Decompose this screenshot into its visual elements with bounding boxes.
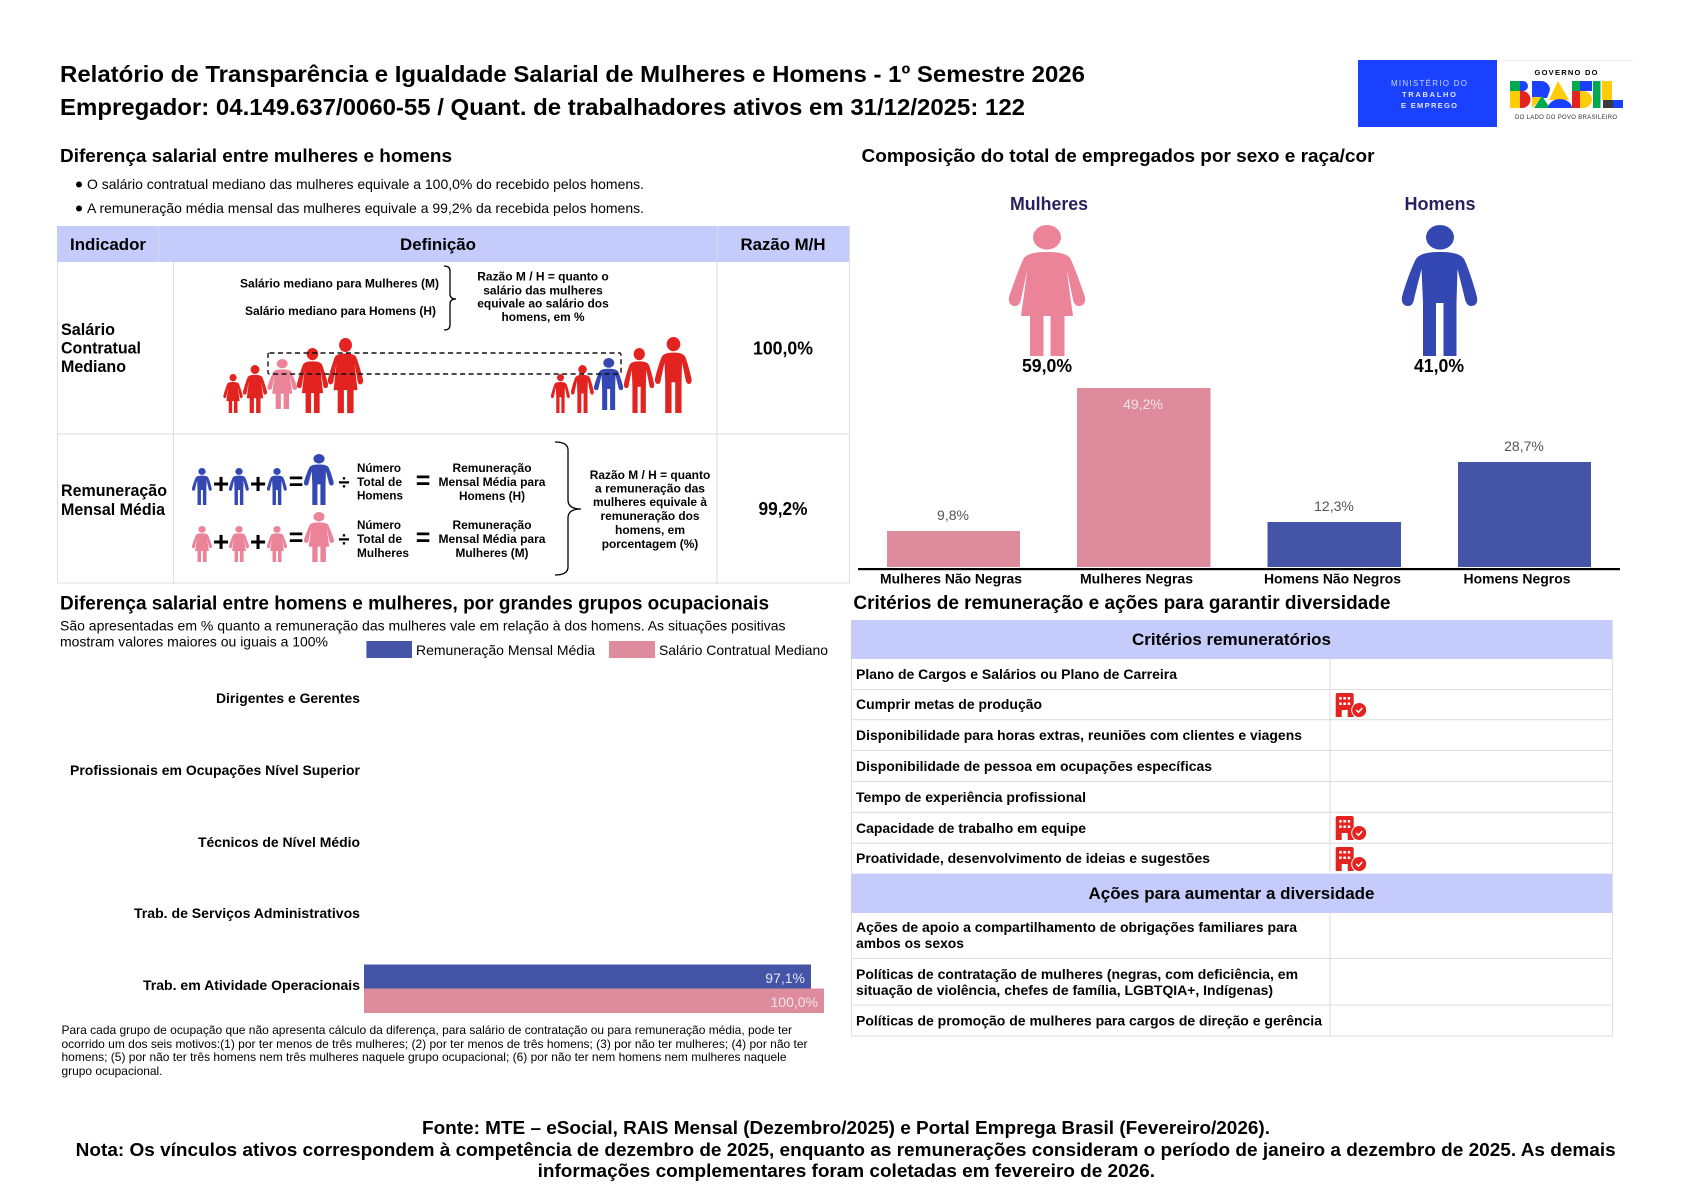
value: 99,2%: [758, 499, 808, 519]
formula: women: ÷: [339, 529, 350, 551]
criteria rows: Disponibilidade para horas extras, reuniões com clientes e viagens: [856, 728, 1302, 743]
heading: grupos ocupacionais: Diferença salarial entre homens e mulheres, por grandes grupos ocupacionais: [60, 594, 769, 614]
criteria rows: [856, 667, 1302, 866]
title: [60, 61, 1085, 120]
row: salário contratual mediano: [61, 266, 813, 413]
criteria rows: Proatividade, desenvolvimento de ideias e sugestões: [856, 851, 1210, 866]
bar chart: grupos ocupacionais: Dirigentes e Gerentes: [216, 690, 360, 706]
row label: Mediano: [61, 358, 126, 376]
bar chart: composição por sexo e raça: 49,2%: [1123, 396, 1163, 412]
logo: Ministério do Trabalho e Emprego / Governo do Brasil: [1358, 60, 1633, 127]
logo: Ministério do Trabalho e Emprego / Governo do Brasil: TRABALHO: [1402, 90, 1456, 99]
definition text: porcentagem (%): [602, 539, 698, 551]
action rows: ambos os sexos: [856, 936, 964, 951]
formula: men: Número: [357, 463, 401, 475]
title: Empregador: 04.149.637/0060-55 / Quant. de trabalhadores ativos em 31/12/2025: 122: [60, 94, 1025, 120]
legend: Salário Contratual Mediano: [659, 642, 828, 658]
bar chart: grupos ocupacionais: [70, 690, 824, 1013]
formula: women: +: [250, 526, 266, 557]
bar chart: grupos ocupacionais: Trab. em Atividade Operacionais: [143, 977, 360, 993]
bar chart: composição por sexo e raça: Mulheres Não Negras: [880, 570, 1022, 586]
logo mark: Brasil: [1510, 81, 1623, 108]
criteria rows: Capacidade de trabalho em equipe: [856, 821, 1087, 836]
row label: Salário: [61, 321, 115, 339]
formula: men: ÷: [339, 472, 350, 494]
row: remuneração mensal média: [61, 442, 808, 575]
panel: homens total: 41,0%: [1414, 356, 1464, 376]
action rows: Políticas de promoção de mulheres para cargos de direção e gerência: [856, 1014, 1322, 1028]
definition text: mulheres equivale à: [593, 497, 708, 509]
action rows: Políticas de contratação de mulheres (negras, com deficiência, em: [856, 967, 1298, 982]
formula labels with brace: Salário mediano para Homens (H): [245, 306, 436, 318]
legend: Remuneração Mensal Média: [416, 642, 595, 658]
bar chart: grupos ocupacionais: Técnicos de Nível Médio: [198, 834, 360, 850]
bar chart: composição por sexo e raça: 28,7%: [1504, 438, 1544, 454]
criteria rows: Plano de Cargos e Salários ou Plano de Carreira: [856, 667, 1178, 682]
definition text: homens, em %: [502, 312, 584, 324]
bullet list: A remuneração média mensal das mulheres equivale a 99,2% da recebida pelos homens.: [87, 200, 644, 216]
footnote: grupo ocupacional.: [62, 1064, 162, 1078]
definition text: Razão M / H = quanto o: [477, 272, 609, 284]
logo: Ministério do Trabalho e Emprego / Governo do Brasil: DO LADO DO POVO BRASILEIRO: [1515, 115, 1617, 121]
panel: mulheres total: Mulheres: [1010, 194, 1088, 214]
criteria rows: Tempo de experiência profissional: [856, 790, 1086, 805]
panel: critérios e ações table: [851, 620, 1613, 1036]
formula: men: Homens: [357, 490, 403, 502]
bar chart: composição por sexo e raça: Homens Não Negros: [1264, 570, 1401, 586]
formula: women: =: [416, 524, 430, 552]
logo: Ministério do Trabalho e Emprego / Governo do Brasil: GOVERNO DO: [1534, 68, 1598, 77]
formula: women: Mulheres: [357, 548, 409, 560]
icon: company check: [1336, 847, 1367, 872]
band heading: critérios remuneratórios: Critérios remuneratórios: [1132, 630, 1331, 649]
heading: diferença salarial: Diferença salarial entre mulheres e homens: [60, 145, 452, 166]
text block: explicação: São apresentadas em % quanto a remuneração das mulheres vale em relação à dos homens. As situações positivas: [60, 618, 786, 634]
footnote: homens; (5) por não ter três homens nem três mulheres naquele grupo ocupacional; (6) por não ter nem homens nem mulheres naquele: [62, 1050, 787, 1064]
table header: Definição: [400, 235, 476, 254]
source note: Nota: Os vínculos ativos correspondem à competência de dezembro de 2025, enquanto as remunerações consideram o período de janeiro a dezembro de 2025. As demais: [76, 1140, 1616, 1160]
logo: Ministério do Trabalho e Emprego / Governo do Brasil: E EMPREGO: [1401, 101, 1457, 110]
value: 100,0%: [753, 338, 813, 358]
row label: [61, 321, 141, 376]
footnote: ocorrido um dos seis motivos:(1) por ter menos de três mulheres; (2) por ter menos de três homens; (3) por não ter mulheres; (4) por não ter: [62, 1037, 808, 1051]
panel: mulheres total: 59,0%: [1022, 356, 1072, 376]
icon: women ordered by salary: [223, 338, 363, 413]
source note: [76, 1118, 1616, 1181]
formula: men: Remuneração: [452, 463, 532, 475]
panel: tabela de indicadores: [57, 226, 850, 583]
bar chart: composição por sexo e raça: [858, 388, 1620, 586]
formula: men: Homens (H): [459, 491, 525, 503]
icon: company check: [1336, 693, 1367, 718]
panel: homens total: [1402, 194, 1477, 376]
table header: Razão M/H: [740, 235, 826, 254]
row label: Remuneração: [61, 482, 167, 500]
formula: women: Remuneração: [452, 520, 532, 532]
icon: men ordered by salary: [551, 337, 692, 413]
formula: women: Número: [357, 520, 401, 532]
panel: homens total: Homens: [1404, 194, 1476, 214]
table header: Indicador: [70, 235, 146, 254]
formula: men: +: [213, 468, 229, 499]
definition text: a remuneração das: [595, 484, 705, 496]
band heading: ações: Ações para aumentar a diversidade: [1088, 884, 1374, 903]
row label: [61, 482, 167, 519]
text block: explicação: mostram valores maiores ou iguais a 100%: [60, 634, 328, 650]
definition text: salário das mulheres: [483, 286, 603, 298]
formula: women: =: [289, 524, 303, 552]
panel: mulheres total: [1009, 194, 1088, 376]
title: Relatório de Transparência e Igualdade Salarial de Mulheres e Homens - 1º Semestre 2026: [60, 61, 1085, 87]
definition text: [477, 272, 609, 324]
heading: critérios: Critérios de remuneração e ações para garantir diversidade: [853, 593, 1390, 614]
row label: Contratual: [61, 340, 141, 358]
formula labels with brace: Salário mediano para Mulheres (M): [240, 278, 439, 290]
bar chart: grupos ocupacionais: Profissionais em Ocupações Nível Superior: [70, 762, 361, 778]
row label: Mensal Média: [61, 501, 166, 519]
bar chart: grupos ocupacionais: 100,0%: [771, 994, 818, 1010]
icon: woman: [1009, 225, 1085, 356]
criteria rows: Disponibilidade de pessoa em ocupações específicas: [856, 759, 1212, 774]
definition text: equivale ao salário dos: [477, 298, 609, 310]
bar chart: grupos ocupacionais: 97,1%: [765, 970, 805, 986]
criteria rows: Cumprir metas de produção: [856, 697, 1042, 712]
formula: women: [192, 512, 546, 562]
dashed median connector: [268, 353, 621, 374]
action rows: situação de violência, chefes de família, LGBTQIA+, Indígenas): [856, 983, 1273, 998]
action rows: [856, 920, 1322, 1028]
icon: man: [1402, 225, 1477, 356]
logo: Ministério do Trabalho e Emprego / Governo do Brasil: MINISTÉRIO DO: [1391, 79, 1467, 88]
formula: women: Mensal Média para: [438, 534, 546, 546]
footnote: [62, 1023, 808, 1078]
source note: Fonte: MTE – eSocial, RAIS Mensal (Dezembro/2025) e Portal Emprega Brasil (Fevereiro/2026).: [422, 1118, 1270, 1138]
bar chart: composição por sexo e raça: 12,3%: [1314, 498, 1354, 514]
formula: men: +: [250, 468, 266, 499]
definition text: Razão M / H = quanto: [590, 470, 710, 482]
bullet list: O salário contratual mediano das mulheres equivale a 100,0% do recebido pelos homens.: [87, 176, 644, 192]
text block: explicação: [60, 618, 786, 650]
formula: women: Mulheres (M): [456, 548, 529, 560]
formula: men: =: [289, 468, 303, 496]
definition text: [590, 470, 710, 551]
icon: company check: [1336, 816, 1367, 840]
footnote: Para cada grupo de ocupação que não apresenta cálculo da diferença, para salário de contratação ou para remuneração média, pode ter: [62, 1023, 792, 1037]
legend: [366, 641, 828, 658]
bar chart: composição por sexo e raça: 9,8%: [937, 507, 969, 523]
table header: [57, 226, 850, 262]
source note: informações complementares foram coletadas em fevereiro de 2026.: [538, 1161, 1155, 1181]
formula labels with brace: [240, 266, 456, 330]
bullet list: [76, 176, 644, 216]
formula: men: Mensal Média para: [438, 477, 546, 489]
formula: men: Total de: [357, 477, 402, 489]
definition text: remuneração dos: [600, 511, 700, 523]
action rows: Ações de apoio a compartilhamento de obrigações familiares para: [856, 920, 1298, 935]
large brace: [555, 442, 581, 575]
bar chart: grupos ocupacionais: Trab. de Serviços Administrativos: [134, 905, 360, 921]
formula: women: Total de: [357, 534, 402, 546]
formula: men: [192, 454, 546, 505]
definition text: homens, em: [615, 525, 685, 537]
bar chart: composição por sexo e raça: Homens Negros: [1464, 570, 1571, 586]
bar chart: composição por sexo e raça: Mulheres Negras: [1080, 570, 1193, 586]
formula: men: =: [416, 467, 430, 495]
heading: composição: Composição do total de empregados por sexo e raça/cor: [862, 145, 1374, 166]
formula: women: +: [213, 526, 229, 557]
